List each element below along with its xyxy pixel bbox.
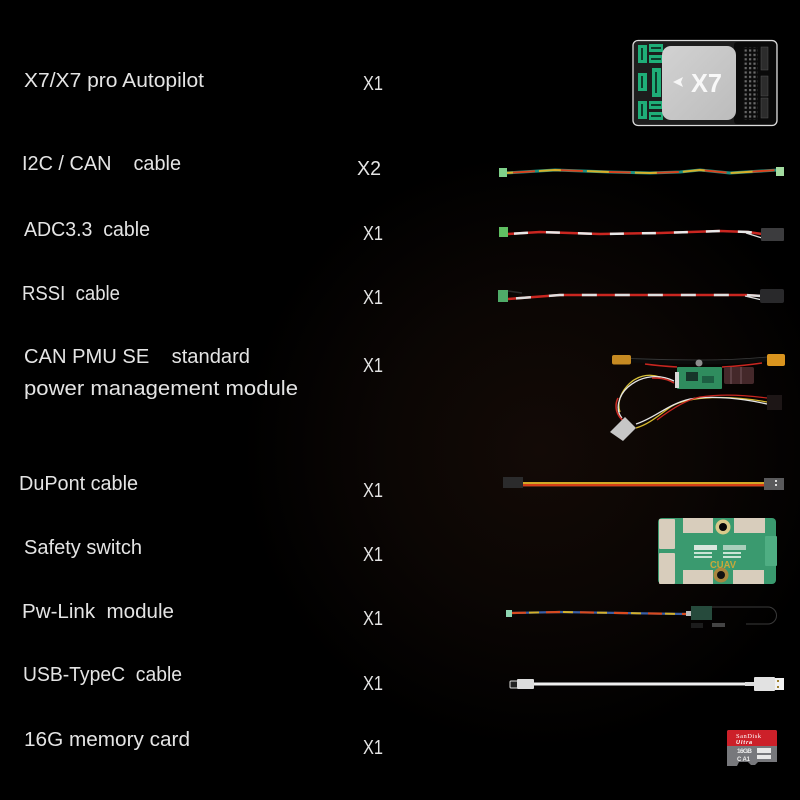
label: X7/X7 pro Autopilot: X7/X7 pro Autopilot [24,70,204,92]
icon: X7 autopilot board [633,40,777,126]
label: I2C / CAN cable: I2C / CAN cable [22,153,181,175]
label: USB-TypeC cable: USB-TypeC cable [23,664,182,686]
icon: X7 autopilot board: X7 [691,68,722,98]
icon: I2C CAN cable [499,167,784,177]
icon: 16G memory card: SanDisk [736,733,762,740]
quantity: DuPont X1: X1 [363,480,383,502]
quantity: ADC cable X1: X1 [363,223,383,245]
icon: 16G memory card: 16GB [737,748,752,755]
icon: 16G memory card [727,730,777,766]
icon: safety switch hub board [658,518,777,584]
quantity: RSSI cable X1: X1 [363,287,383,309]
label: CAN PMU SE standard power management module [24,346,298,400]
quantity: safety switch X1: X1 [363,544,383,566]
quantity: I2C cable X2: X2 [357,158,381,180]
quantity: PMU X1: X1 [363,355,383,377]
icon: ADC3.3 cable [499,227,784,241]
icon: USB-TypeC cable [510,677,784,691]
icon: RSSI cable [498,289,784,303]
label: Safety switch: Safety switch [24,537,142,559]
label: CAN PMU SE standard power management module: CAN PMU SE standard [24,346,250,368]
quantity: autopilot X1: X1 [363,73,383,95]
quantity: memory card X1: X1 [363,737,383,759]
icon: 16G memory card: Ultra [736,740,752,746]
label: 16G memory card: 16G memory card [24,729,190,751]
icon: DuPont cable [503,477,784,490]
quantity: Pw-Link X1: X1 [363,608,383,630]
label: ADC3.3 cable: ADC3.3 cable [24,219,150,241]
icon: CAN PMU SE power module [610,354,785,441]
icon: Pw-Link module [506,606,776,628]
label: RSSI cable: RSSI cable [22,283,120,305]
label: CAN PMU SE standard power management module: power management module [24,378,298,400]
label: DuPont cable: DuPont cable [19,473,138,495]
label: Pw-Link module: Pw-Link module [22,601,174,623]
quantity: USB X1: X1 [363,673,383,695]
icon: 16G memory card: C A1 [737,757,751,763]
icon: safety switch hub board: CUAV [710,560,736,571]
